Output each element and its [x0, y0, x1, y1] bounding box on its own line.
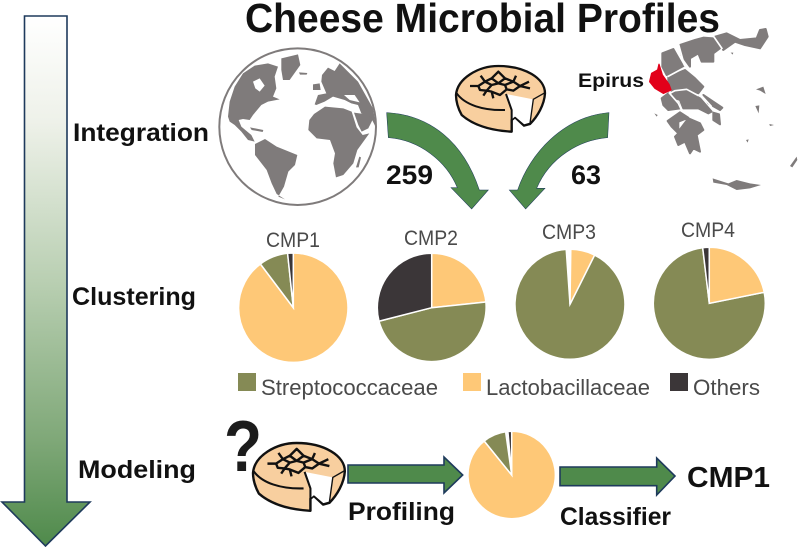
- pie chart: CMP3: [515, 249, 625, 359]
- icon: globe: [219, 48, 376, 205]
- count: 259: 259: [386, 160, 433, 190]
- pie label: CMP1: CMP1: [266, 229, 320, 252]
- legend label: Others: Others: [693, 375, 760, 400]
- legend swatch: Lactobacillaceae: [463, 373, 481, 391]
- heading: Clustering: Clustering: [72, 283, 196, 311]
- legend label: Lactobacillaceae: Lactobacillaceae: [486, 375, 650, 400]
- legend: [238, 373, 760, 400]
- arrow: classifier: [560, 458, 675, 495]
- arrow: Epirus datasets: [509, 113, 609, 209]
- pie chart: predicted profile: [468, 431, 555, 519]
- arrow: profiling: [348, 457, 463, 493]
- workflow arrow: [2, 16, 90, 546]
- pie chart: CMP2: [377, 253, 486, 362]
- icon: unknown cheese: [253, 443, 345, 511]
- result: CMP1: CMP1: [687, 462, 770, 494]
- label: Profiling: Profiling: [348, 498, 455, 526]
- legend swatch: Streptococcaceae: [238, 373, 256, 391]
- pie label: CMP4: CMP4: [681, 219, 735, 242]
- map: Greece: [650, 29, 797, 190]
- count: 63: 63: [571, 160, 601, 190]
- label: Classifier: Classifier: [560, 503, 671, 531]
- legend label: Streptococcaceae: Streptococcaceae: [261, 375, 438, 400]
- icon: question mark: ?: [224, 407, 262, 487]
- arrow: global datasets: [387, 113, 488, 209]
- label: Epirus: Epirus: [578, 71, 644, 92]
- pie label: CMP3: CMP3: [542, 221, 596, 244]
- legend swatch: Others: [670, 373, 688, 391]
- heading: Integration: Integration: [73, 119, 209, 147]
- heading: Modeling: Modeling: [78, 456, 196, 484]
- pie label: CMP2: CMP2: [404, 227, 458, 250]
- Epirus region: [650, 64, 671, 93]
- icon: cheese: [456, 66, 545, 132]
- pie chart: CMP4: [653, 247, 765, 359]
- pie chart: CMP1: [239, 253, 348, 362]
